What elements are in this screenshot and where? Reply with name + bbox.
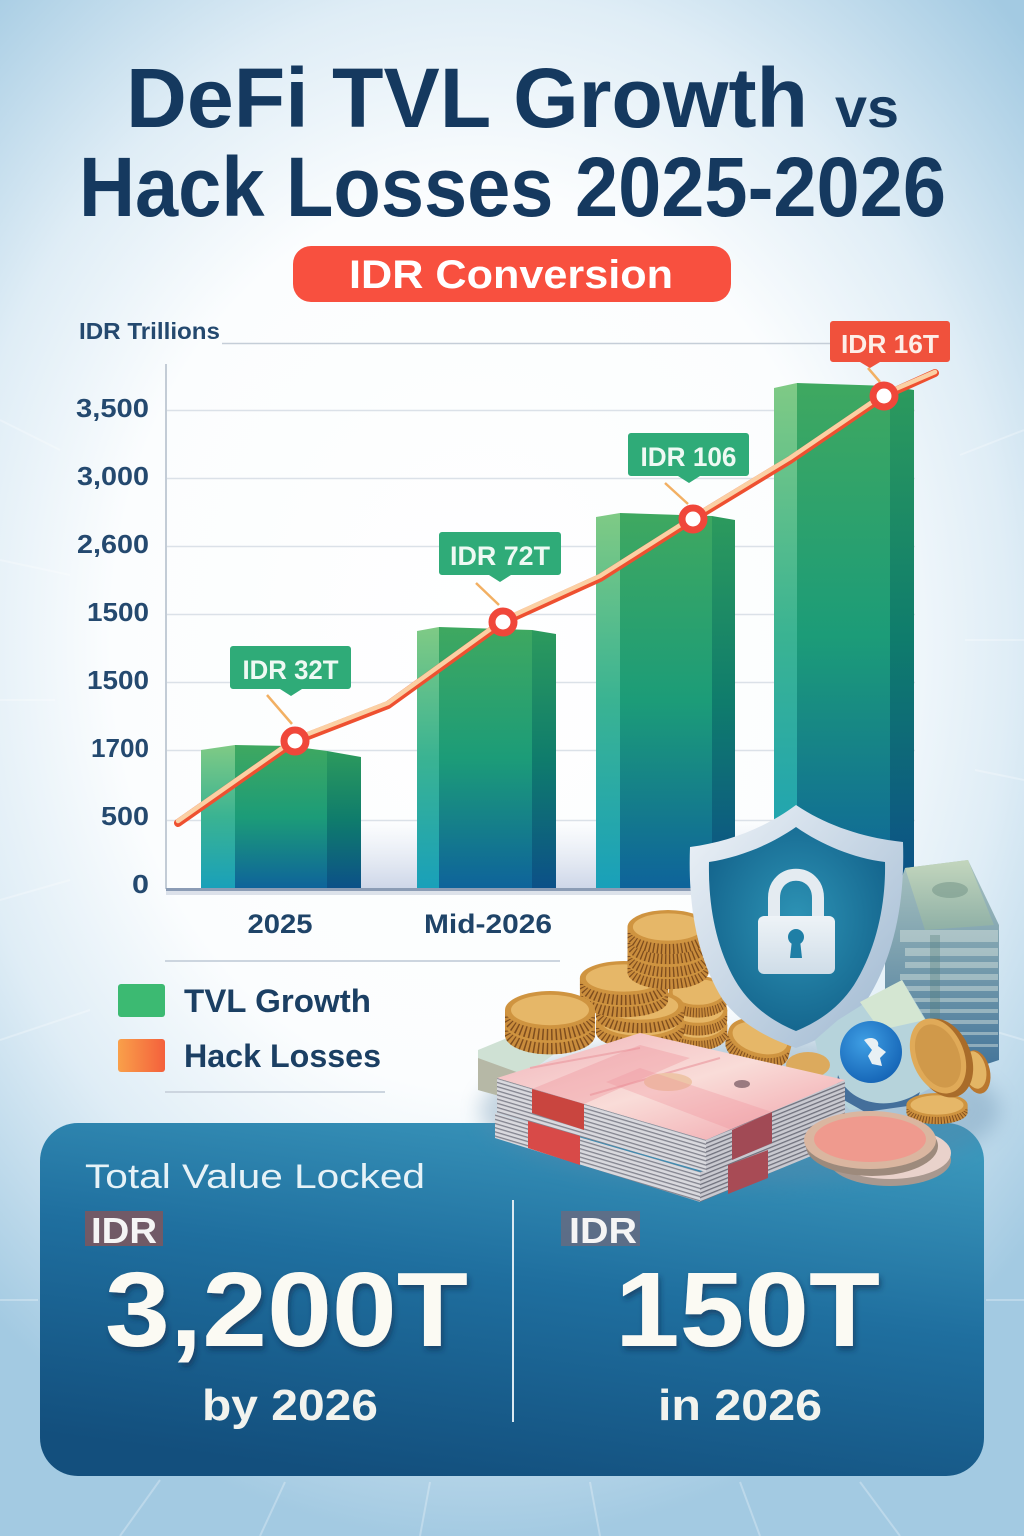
line markers xyxy=(284,385,895,752)
stat: hack losses xyxy=(561,1210,880,1430)
callout IDR 32T xyxy=(230,646,351,696)
callout IDR 106: IDR 106 xyxy=(640,442,736,472)
icon: pink coins xyxy=(804,1111,951,1186)
bar 4 xyxy=(774,383,914,889)
illustration: money, coins and shield xyxy=(478,805,1000,1202)
x axis labels: Mid-2026 xyxy=(424,909,552,939)
icon: teal banknotes left xyxy=(478,1036,560,1103)
stat: TVL: by 2026 xyxy=(202,1381,378,1430)
stat: hack losses: IDR xyxy=(569,1210,637,1251)
legend item: hack losses: Hack Losses xyxy=(184,1038,381,1074)
icon: gold coin stacks xyxy=(505,910,796,1076)
icon: pink rupiah banknote stacks xyxy=(495,1033,845,1202)
bar mid-2026 xyxy=(417,627,556,889)
callout leaders xyxy=(267,368,880,724)
callout IDR 72T: IDR 72T xyxy=(450,541,550,571)
hack losses line xyxy=(178,372,935,823)
stat: hack losses: in 2026 xyxy=(658,1381,822,1430)
icon: gold coins right xyxy=(786,1009,994,1124)
x axis labels xyxy=(248,909,552,939)
bar 3 xyxy=(596,513,735,889)
padlock xyxy=(758,875,835,974)
legend item: TVL growth: TVL Growth xyxy=(184,983,371,1019)
x axis labels: 2025 xyxy=(248,909,312,939)
y axis labels: 0 xyxy=(132,869,149,899)
y axis labels: 500 xyxy=(101,801,149,831)
icon: green banknote stack xyxy=(885,860,999,1068)
subtitle pill: IDR Conversion xyxy=(349,253,673,297)
callout IDR 16T xyxy=(830,321,950,368)
y axis labels: 3,500 xyxy=(76,393,149,423)
title: vs xyxy=(835,76,899,139)
legend xyxy=(118,961,560,1092)
callout IDR 16T: IDR 16T xyxy=(841,329,939,359)
y axis labels: 1700 xyxy=(91,733,149,763)
stat: TVL: 3,200T xyxy=(105,1251,468,1369)
panel divider xyxy=(512,1200,514,1422)
stat: hack losses: 150T xyxy=(615,1251,880,1369)
title xyxy=(79,51,946,234)
callout IDR 32T: IDR 32T xyxy=(242,655,339,685)
y axis labels: 3,000 xyxy=(77,461,149,491)
title: Hack Losses 2025-2026 xyxy=(79,140,946,234)
stat: TVL xyxy=(85,1210,468,1430)
icon: security shield with padlock xyxy=(690,805,903,1048)
callout IDR 72T xyxy=(439,532,561,582)
bottom stats panel xyxy=(40,1123,984,1476)
callout IDR 106 xyxy=(628,433,749,483)
subtitle pill xyxy=(293,246,731,302)
title: DeFi TVL Growth xyxy=(126,51,808,145)
y axis labels: 1500 xyxy=(87,665,149,695)
axis unit label: IDR Trillions xyxy=(79,318,220,344)
y axis labels: 2,600 xyxy=(77,529,149,559)
chart xyxy=(76,318,950,939)
stat: TVL: IDR xyxy=(91,1210,157,1251)
bar 2025 xyxy=(201,745,361,889)
y axis labels: 1500 xyxy=(87,597,149,627)
y axis labels xyxy=(76,393,149,899)
money bands xyxy=(532,1089,584,1130)
icon: blue banknote bundle with token xyxy=(815,980,945,1112)
panel label: total value locked: Total Value Locked xyxy=(85,1158,425,1196)
